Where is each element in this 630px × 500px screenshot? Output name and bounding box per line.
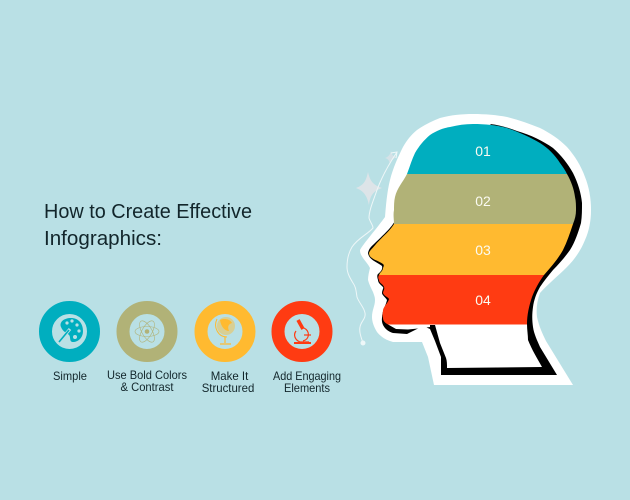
band labels: 03 [475, 242, 491, 258]
head color bands [369, 124, 576, 368]
ring [278, 308, 326, 356]
white neck [388, 324, 542, 368]
title: Infographics: [44, 228, 162, 250]
ring [201, 308, 249, 356]
item: engaging elements [273, 308, 341, 395]
title: How to Create Effective [44, 201, 252, 223]
band 01 [407, 124, 567, 174]
decoration: sparkle star [356, 172, 382, 205]
band labels: 02 [475, 193, 491, 209]
item: structured [201, 308, 254, 395]
decoration: small sparkle [385, 151, 396, 164]
icon: microscope [294, 320, 311, 343]
title [44, 201, 252, 250]
ring [123, 308, 171, 356]
item: engaging elements: Elements [284, 381, 330, 395]
item: bold colors [107, 308, 187, 394]
icon: palette [58, 318, 83, 343]
band labels [475, 143, 491, 308]
icon: globe [216, 317, 235, 344]
band 04 [378, 275, 544, 324]
black outline [368, 124, 582, 375]
chin strip [389, 325, 430, 330]
white halo [360, 114, 591, 385]
label: Use Bold Colors [107, 368, 187, 382]
head illustration [360, 110, 591, 385]
ring [46, 308, 94, 356]
label: Make It [211, 369, 249, 383]
icon: atom [135, 319, 159, 344]
band 02 [394, 174, 576, 224]
item: structured: Structured [202, 381, 254, 395]
item: bold colors: & Contrast [120, 380, 174, 394]
label: Simple [53, 369, 87, 383]
item: simple [46, 308, 94, 383]
band labels: 01 [475, 143, 491, 159]
label: Add Engaging [273, 369, 341, 383]
band 03 [369, 224, 573, 275]
band labels: 04 [475, 292, 491, 308]
decoration: curved arrow [347, 152, 397, 345]
